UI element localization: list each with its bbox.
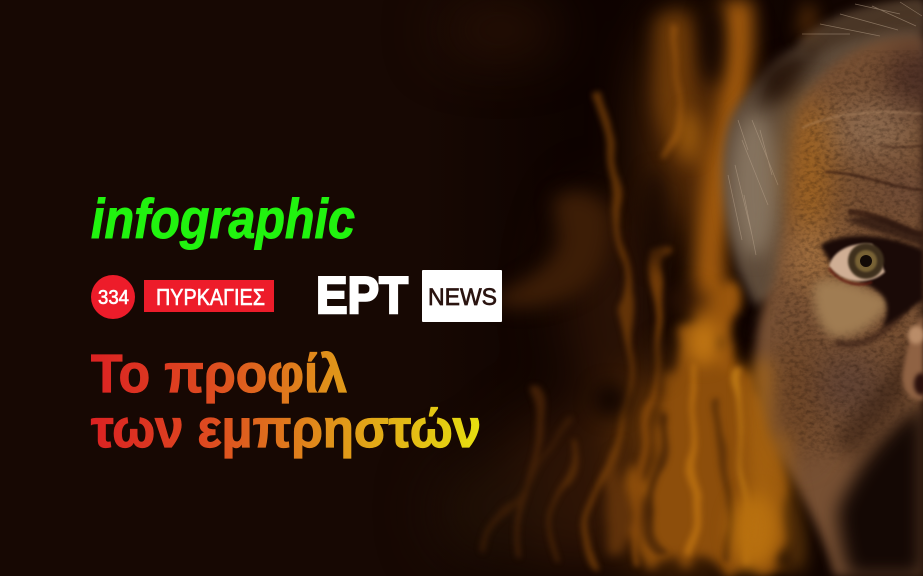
face: beard shadow: [838, 405, 923, 576]
infographic heading: infographic: [91, 187, 355, 250]
face: nose: [902, 315, 923, 400]
face: eye: [820, 236, 923, 328]
badge label: ΠΥΡΚΑΓΙΕΣ: [144, 280, 274, 312]
badge label: ΠΥΡΚΑΓΙΕΣ: ΠΥΡΚΑΓΙΕΣ: [156, 284, 265, 310]
badge: 334 ΠΥΡΚΑΓΙΕΣ: [91, 275, 274, 319]
logo: ΕΡΤ NEWS: [316, 267, 502, 325]
badge circle: 334: 334: [98, 287, 129, 309]
logo wordmark: ΕΡΤ: ΕΡΤ: [316, 267, 408, 325]
logo box: NEWS: [422, 270, 502, 322]
face: under-eye bag: [813, 279, 892, 337]
title: Το προφίλ: [91, 344, 347, 404]
face: hair: [723, 0, 923, 305]
face: flames over the jaw: [750, 8, 810, 565]
logo box: NEWS: NEWS: [428, 284, 497, 311]
flames: wisps: [470, 25, 750, 560]
face: skin: [756, 37, 923, 576]
face: forehead wrinkles: [802, 112, 923, 234]
title: των εμπρηστών: [91, 399, 481, 459]
badge circle: 334: [91, 275, 135, 319]
face: eyebrow: [845, 216, 923, 246]
face: skin texture: [770, 50, 923, 480]
flames: mid tongues: [490, 0, 754, 320]
flames: soft glow masses: [435, 6, 765, 570]
title: [91, 344, 481, 459]
flames: hot spots and dark pockets: [593, 5, 779, 566]
photo: flames: [435, 0, 795, 570]
flames: main fire body: [600, 287, 795, 560]
photo: face: [723, 0, 923, 576]
